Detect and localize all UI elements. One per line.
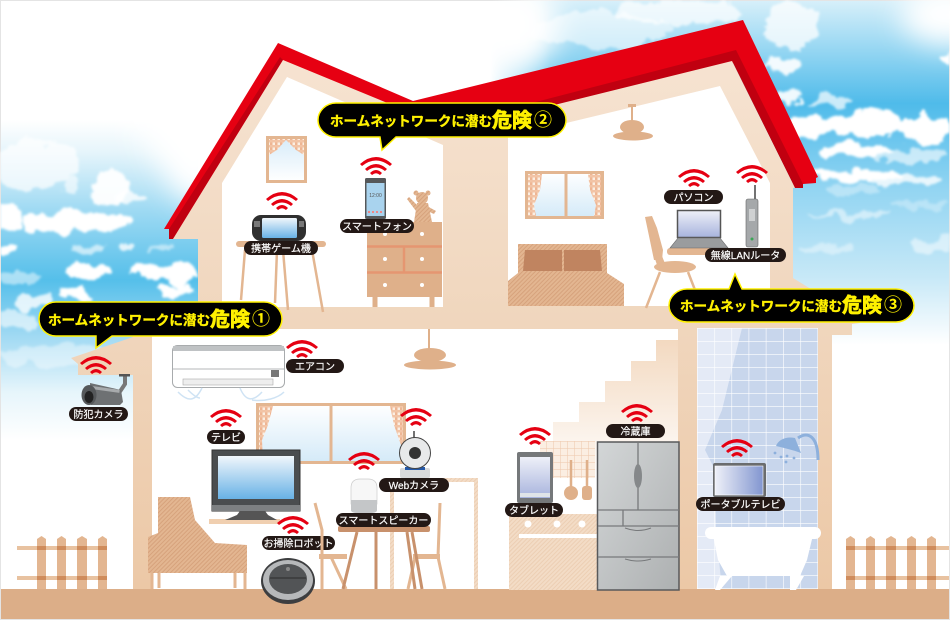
wifi signal: computer	[678, 169, 710, 187]
tablet	[517, 452, 553, 503]
portable game console	[252, 215, 306, 241]
wifi signal: router	[736, 165, 768, 183]
callout: danger 2: ホームネットワークに潜む	[330, 113, 492, 129]
label: 携帯ゲーム機	[244, 241, 318, 255]
label: タブレット: タブレット	[509, 504, 559, 517]
living room window	[258, 404, 404, 463]
label: Webカメラ	[379, 478, 449, 492]
label: 携帯ゲーム機: 携帯ゲーム機	[251, 242, 311, 255]
callout: danger 3	[669, 274, 914, 322]
callout: danger 2: ②	[534, 110, 552, 130]
desk	[667, 248, 729, 255]
callout: danger 2: 危険	[492, 108, 532, 132]
television shelf	[209, 519, 280, 524]
portable game table	[236, 241, 326, 312]
bed	[508, 244, 624, 306]
smart speaker	[351, 479, 377, 513]
label: 無線LANルータ: 無線LANルータ	[711, 249, 780, 262]
callout: danger 1: ホームネットワークに潜む	[48, 312, 210, 328]
wifi signal: web camera	[400, 408, 432, 426]
label: エアコン	[286, 359, 344, 373]
label: パソコン	[664, 190, 723, 204]
smartphone: 12:00	[369, 193, 382, 199]
label: スマートフォン: スマートフォン	[342, 222, 412, 233]
web camera	[400, 431, 430, 478]
room: lower living and kitchen	[152, 329, 678, 590]
lower door frame	[392, 480, 476, 589]
sofa	[148, 497, 247, 589]
callout: danger 3: ③	[884, 295, 902, 315]
security camera	[82, 374, 130, 405]
callout: danger 1	[39, 302, 282, 348]
upstairs right window	[526, 172, 602, 218]
wifi signal: television	[210, 409, 242, 427]
label: パソコン: パソコン	[674, 192, 714, 204]
label: ポータブルテレビ: ポータブルテレビ	[700, 498, 780, 511]
sky: left with clouds	[0, 40, 300, 440]
room: bathroom tiles	[697, 328, 818, 590]
label: 防犯カメラ	[69, 407, 128, 421]
ceiling lamp downstairs	[404, 329, 456, 370]
label: エアコン: エアコン	[295, 362, 335, 373]
house: walls and floors	[71, 60, 860, 590]
wireless LAN router	[746, 185, 758, 247]
portable television	[713, 463, 766, 497]
callout: danger 1: 危険	[210, 307, 250, 331]
label: 無線LANルータ	[705, 248, 786, 262]
laptop computer	[670, 210, 728, 248]
robot vacuum	[261, 558, 315, 604]
upstairs left window	[268, 138, 306, 182]
label: 冷蔵庫: 冷蔵庫	[620, 425, 650, 438]
callout: danger 2	[318, 103, 566, 150]
callout: danger 3: 危険	[842, 293, 882, 317]
air conditioner	[172, 346, 284, 401]
refrigerator	[598, 442, 679, 590]
room: upper right	[508, 86, 770, 306]
smartphone	[365, 178, 386, 219]
bathtub	[705, 527, 821, 590]
dining table and chairs	[315, 503, 445, 589]
wifi signal: portable television	[721, 439, 753, 457]
television	[212, 450, 300, 520]
ceiling lamp upstairs	[613, 104, 653, 140]
wifi signal: air conditioner	[286, 340, 318, 358]
ground	[1, 589, 949, 619]
label: タブレット	[505, 503, 563, 517]
shower head	[774, 435, 818, 463]
wifi signal: camera	[80, 356, 112, 374]
callout: danger 3: ホームネットワークに潜む	[680, 298, 842, 314]
wifi signal: robot vacuum	[277, 516, 309, 534]
room: upper left	[222, 77, 443, 307]
house: red roof	[164, 20, 818, 239]
label: テレビ	[207, 430, 245, 444]
wifi signal: smartphone	[360, 157, 392, 175]
kitchen wall tiles and utensils	[540, 441, 595, 500]
sky: right with clouds	[460, 0, 950, 345]
wifi signal: tablet	[519, 427, 551, 445]
callout: danger 1: ①	[252, 309, 270, 329]
label: 防犯カメラ: 防犯カメラ	[74, 408, 124, 421]
fence: left	[17, 536, 107, 589]
dresser	[367, 222, 442, 307]
staircase	[553, 340, 678, 480]
fence: right	[846, 536, 949, 589]
label: 冷蔵庫	[606, 424, 665, 438]
kitchen counter	[509, 514, 598, 590]
wifi signal: game	[266, 192, 298, 210]
label: お掃除ロボット: お掃除ロボット	[264, 537, 334, 550]
wifi signal: refrigerator	[621, 404, 653, 422]
desk chair	[645, 216, 696, 308]
label: テレビ: テレビ	[211, 432, 241, 444]
teddy bear	[407, 190, 436, 222]
label: スマートスピーカー: スマートスピーカー	[339, 515, 428, 527]
wifi signal: smart speaker	[348, 452, 380, 470]
label: Webカメラ: Webカメラ	[389, 480, 439, 492]
